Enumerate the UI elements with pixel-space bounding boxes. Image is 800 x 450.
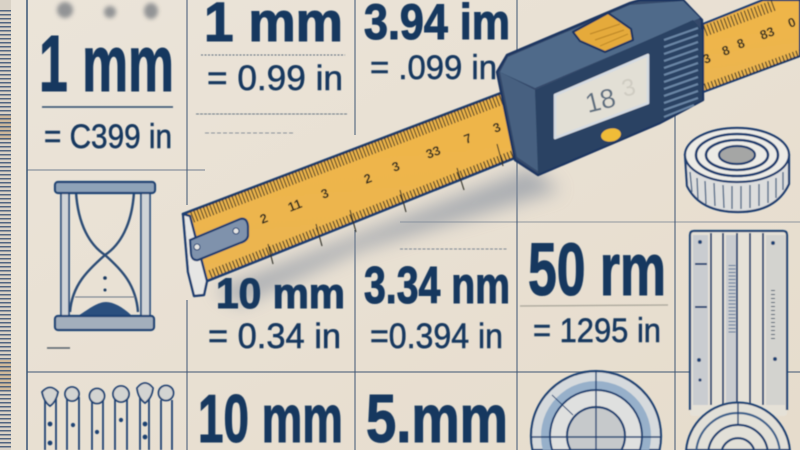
tape blade left: 3 — [319, 185, 331, 202]
measuring tape — [183, 0, 800, 296]
cell: 1 mm top — [196, 0, 348, 133]
case display — [555, 55, 648, 138]
icon: hourglass — [47, 182, 155, 348]
cell: 50 rm: = 1295 in — [533, 312, 661, 350]
case display: 18 — [582, 82, 619, 119]
tape blade right: 0 — [786, 14, 798, 31]
tape blade right: 83 — [758, 24, 777, 43]
ruler drop shadow — [215, 168, 560, 305]
icon: row of pins — [42, 383, 174, 450]
cell: 3.34 nm: =0.394 in — [370, 317, 503, 356]
icon: tape coil — [685, 128, 789, 212]
tape blade right — [701, 0, 800, 92]
icon: steel rule panel — [690, 231, 787, 416]
tape blade left: 7 — [462, 130, 474, 147]
tape case — [497, 0, 703, 175]
cell: 10 mm middle: 10 mm — [216, 270, 345, 318]
cell: 1 mm large — [39, 19, 174, 156]
tape blade left: 3 — [491, 119, 503, 136]
case yellow button — [600, 127, 622, 143]
icon: lower right concentric arcs — [686, 403, 790, 450]
case top slider — [573, 13, 633, 52]
left edge ruler strip — [0, 0, 11, 450]
tape blade left — [183, 87, 527, 281]
tape blade left: 2 — [362, 170, 374, 187]
cell: 1 mm large: = C399 in — [44, 118, 172, 156]
tape blade right: 3 — [701, 50, 713, 67]
tape blade right: 8 — [720, 42, 732, 59]
case display: 3 — [619, 73, 638, 103]
tape blade left: 3 — [390, 158, 402, 175]
case grille — [664, 28, 698, 117]
cell: 3.94 im — [364, 0, 510, 87]
tape blade left: 2 — [258, 210, 270, 227]
cell: 10 mm middle — [208, 270, 345, 356]
cell: 1 mm large: 1 mm — [39, 19, 174, 108]
tape hook — [183, 214, 248, 296]
tape blade left: 33 — [424, 143, 443, 162]
cell: 3.94 im: = .099 in — [370, 49, 497, 87]
icon: concentric circle gauge — [531, 371, 661, 450]
cell: 3.34 nm: 3.34 nm — [364, 257, 510, 315]
cell: 3.34 nm — [364, 249, 510, 356]
cell: 50 rm — [520, 228, 668, 350]
cell: 1 mm top: = 0.99 in — [207, 59, 343, 98]
cell: 10 mm middle: = 0.34 in — [208, 317, 341, 356]
smudged header marks — [57, 2, 158, 19]
tape blade left: 11 — [286, 196, 304, 215]
cell: 50 rm: 50 rm — [528, 228, 666, 311]
tape blade right: 8 — [735, 35, 747, 52]
